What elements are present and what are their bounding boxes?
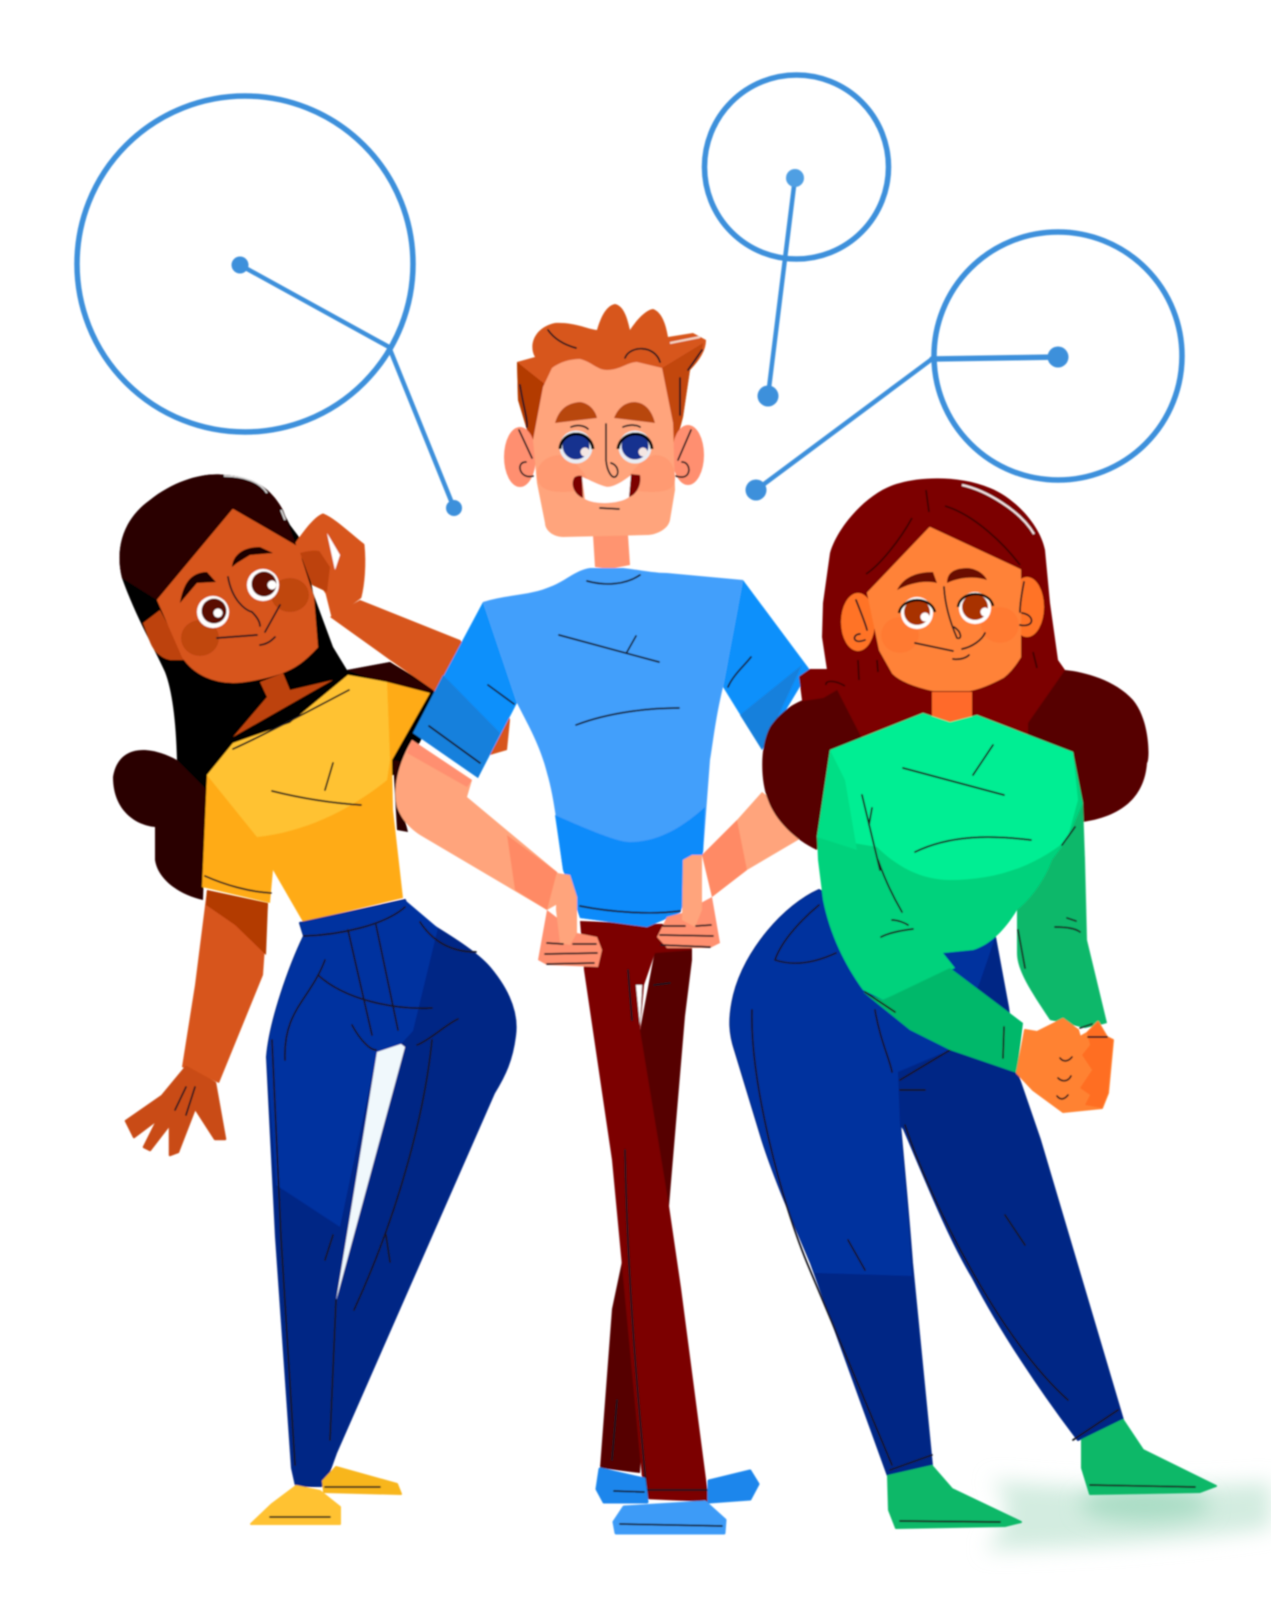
right woman clasped hands xyxy=(1017,1019,1113,1112)
figure: right woman xyxy=(730,478,1216,1528)
man head xyxy=(504,304,706,537)
right woman blue jeans xyxy=(730,890,1123,1476)
right woman face xyxy=(841,528,1044,722)
left woman yellow shirt xyxy=(202,675,430,922)
left woman lower arm and hand xyxy=(126,890,268,1155)
figure: left woman xyxy=(113,474,516,1524)
connected circles network xyxy=(77,75,1182,516)
right woman near sleeve xyxy=(863,968,1023,1073)
man left sleeve xyxy=(413,602,517,778)
man maroon trousers xyxy=(580,921,709,1502)
network node: right circle xyxy=(746,232,1182,500)
right woman green shoes xyxy=(888,1420,1216,1528)
man right arm (viewer's right) xyxy=(702,792,815,897)
man neck xyxy=(593,535,630,569)
man ears xyxy=(504,425,704,487)
network node: top circle xyxy=(704,75,888,406)
man left arm (viewer's left) xyxy=(395,740,577,910)
right woman far sleeve xyxy=(1017,752,1107,1028)
man right fist xyxy=(657,855,720,948)
right woman sweater body xyxy=(817,713,1083,1000)
right woman hair xyxy=(762,478,1149,850)
left woman raised arm xyxy=(297,515,510,755)
man blue shoes xyxy=(597,1469,758,1533)
network node: large circle xyxy=(77,96,462,516)
man hands xyxy=(538,855,720,967)
man blue t-shirt xyxy=(413,568,810,927)
figure: man in the centre xyxy=(395,304,815,1533)
man left fist xyxy=(538,873,602,967)
man hair xyxy=(517,304,706,450)
left woman head xyxy=(143,510,333,737)
right woman green sweater xyxy=(817,713,1107,1073)
left woman yellow shoes xyxy=(251,1467,401,1524)
left woman blue jeans xyxy=(267,900,516,1486)
man face xyxy=(533,359,675,537)
left woman hair xyxy=(113,474,445,900)
ground shadow xyxy=(985,1480,1271,1550)
man right sleeve xyxy=(723,580,810,750)
